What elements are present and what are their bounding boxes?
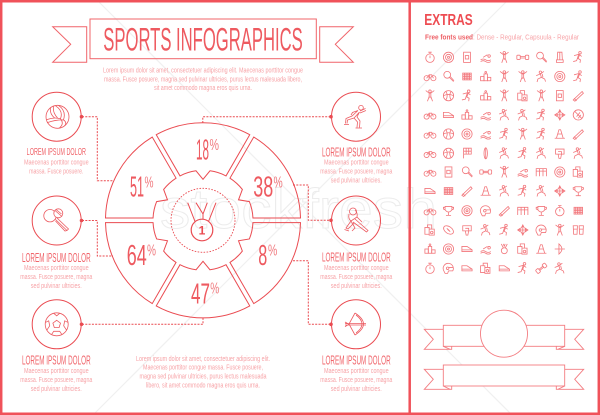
label: item 3 right: massa. Fusce posuere, magna [320,377,392,384]
percent values: 51 [130,172,144,204]
fonts note [425,33,579,42]
label: item 2 right: Maecenas porttitor congue [324,265,389,272]
title text: SPORTS INFOGRAPHICS [103,22,303,58]
label: item 3 right: sed pulvinar ultricies. [331,386,382,393]
label: item 2 right: LOREM IPSUM DOLOR [322,251,391,265]
label: item 1 right: LOREM IPSUM DOLOR [322,146,391,160]
watermark: stockfresh [160,177,437,240]
percent values: % [274,174,283,192]
label: item 1 right: sed pulvinar ultricies. [331,178,382,184]
percent values: 18 [196,134,209,166]
percent values: 47 [191,278,210,310]
item: soccer [32,300,81,349]
label: item 3 left: sed pulvinar ultricies. [31,386,82,393]
item: archery [332,300,380,349]
label: item 1 right: massa. Fusce posuere, magna [320,168,392,176]
icon: soccer ball [45,313,68,336]
intro text: Lorem ipsum dolor sit amet, consectetuer adipiscing elit. Maecenas porttitor congue [103,68,303,75]
intro text: sit amet commodo magna eros quis urna. [154,85,252,92]
icon grid [424,52,583,274]
icon: volleyball [46,105,69,128]
label: item 3 right: Maecenas porttitor congue [324,368,389,375]
label: item 3 left: LOREM IPSUM DOLOR [22,354,91,368]
icon: medal [188,203,216,241]
item: table tennis [32,196,81,245]
label: item 1 right [320,146,392,184]
label: item 3 right [320,353,392,393]
icon: table tennis racket [44,209,68,231]
label: item 2 left [20,251,92,290]
label: item 1 left [24,146,89,175]
label: item 2 right [320,251,392,290]
central wheel [95,123,311,318]
icon: bow and arrow [345,313,366,335]
label: item 3 left: massa. Fusce posuere, magna [20,377,92,384]
percent values: % [144,174,154,192]
label: item 2 right: sed pulvinar ultricies. [331,283,382,290]
fonts note: : Dense - Regular, Capsuula - Regular [473,33,579,42]
percent values: 38 [253,172,273,204]
percent values: % [210,280,219,298]
item: volleyball [32,92,81,141]
label: item 1 left: Maecenas porttitor congue [24,160,89,166]
icon: skater [344,105,366,128]
bottom paragraph: magna sed pulvinar ultricies, purus lectus malesuada [140,374,267,380]
label: item 3 left: Maecenas porttitor congue [24,368,89,375]
label: item 1 right: Maecenas porttitor congue [324,160,389,166]
frame: main panel [1,1,410,414]
blank ribbon [424,365,584,389]
intro text: massa. Fusce posuere, magna sed pulvinar ultricies, purus lectus malesuada libero, [104,76,302,83]
blank ribbon with circle [424,310,584,357]
item: skater [332,92,380,141]
bottom paragraph: libero, sit amet commodo magna eros quis urna. [146,382,260,389]
bottom paragraph: Maecenas porttitor congue massa. Fusce posuere, [143,365,263,372]
percent values [127,134,283,310]
percent values: % [268,242,277,260]
bottom paragraph [136,356,270,389]
item: hockey [332,196,380,245]
label: item 3 right: LOREM IPSUM DOLOR [322,353,391,367]
intro text [103,68,303,92]
label: item 3 left [20,354,92,393]
percent values: 64 [127,240,147,272]
percent values: % [147,242,156,260]
label: item 2 right: massa. Fusce posuere, magna [320,274,392,281]
label: item 2 left: massa. Fusce posuere, magna [20,274,92,281]
label: item 1 left: massa. Fusce posuere. [29,168,83,175]
icon: hockey player [344,208,368,232]
extras heading: EXTRAS [424,12,473,29]
bottom paragraph: Lorem ipsum dolor sit amet, consectetuer adipiscing elit. [136,356,270,363]
title banner [53,19,353,62]
label: item 2 left: Maecenas porttitor congue [24,265,89,272]
frame: extras panel [410,1,599,414]
percent values: % [210,137,219,154]
label: item 2 left: LOREM IPSUM DOLOR [22,251,91,265]
connectors [80,115,333,326]
label: item 2 left: sed pulvinar ultricies. [31,283,82,290]
fonts note: Free fonts used [425,33,473,42]
percent values: 8 [258,240,267,272]
icon: medal: 1 [199,224,206,238]
label: item 1 left: LOREM IPSUM DOLOR [27,146,86,158]
